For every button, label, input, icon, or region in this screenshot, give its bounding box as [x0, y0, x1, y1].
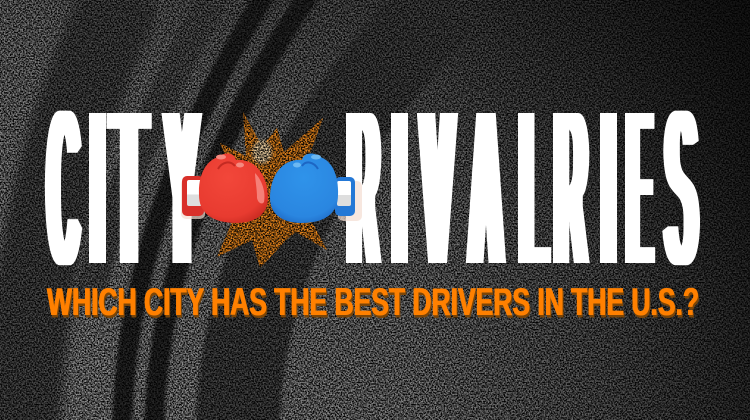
title: RIVALRIES: A	[470, 58, 502, 318]
tire track: narrow dark stripe one	[122, 0, 268, 420]
title: CITY: C	[48, 59, 79, 318]
starburst	[217, 112, 327, 268]
tire track: wide right band	[238, 0, 455, 420]
title: RIVALRIES: I	[602, 58, 615, 318]
title: RIVALRIES: S	[665, 57, 697, 318]
icon: red boxing glove	[181, 154, 268, 223]
tire track: medium band	[90, 0, 218, 300]
title: RIVALRIES: E	[628, 58, 652, 318]
title: RIVALRIES: L	[520, 57, 548, 318]
tire track: wide left band	[20, 0, 125, 420]
icon: blue boxing glove	[270, 154, 362, 223]
title: RIVALRIES: V	[422, 57, 453, 318]
title: RIVALRIES	[348, 57, 697, 318]
title: RIVALRIES: R	[348, 59, 379, 318]
title: CITY	[48, 57, 199, 318]
title: CITY: I	[91, 58, 104, 318]
title: RIVALRIES: I	[393, 58, 406, 318]
title: CITY: Y	[165, 58, 199, 318]
tire track: narrow dark stripe two	[154, 0, 312, 420]
title: CITY: T	[111, 57, 147, 317]
title: RIVALRIES: R	[555, 58, 587, 318]
